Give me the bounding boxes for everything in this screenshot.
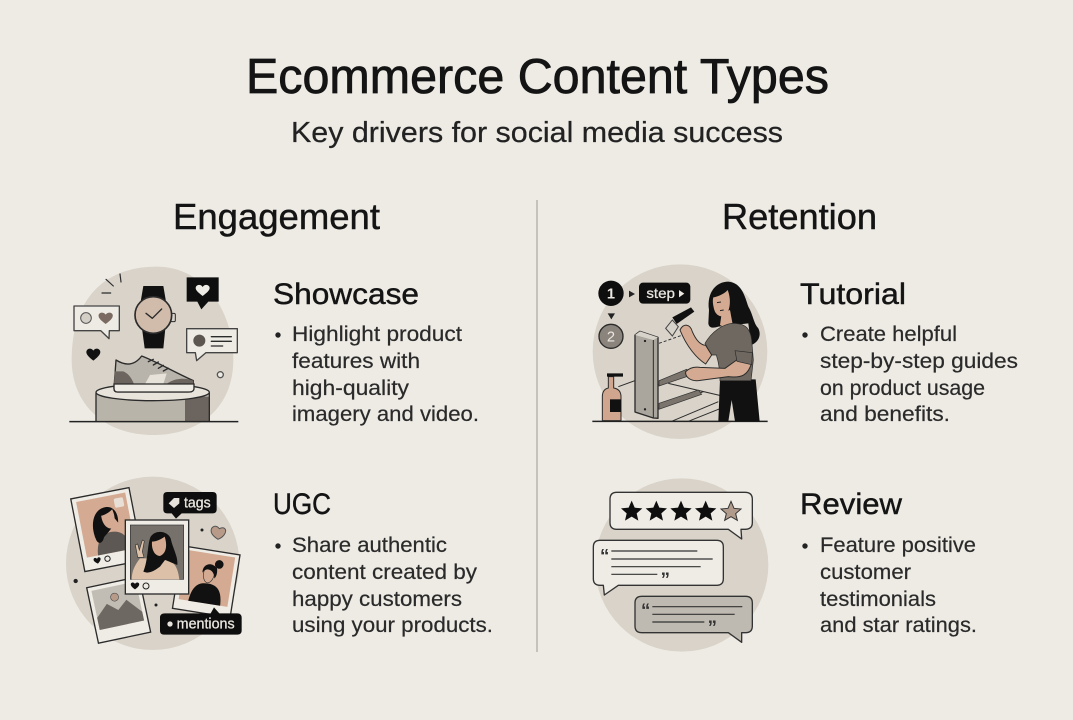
text: Tutorial bullet: step-by-step guides [820,350,1018,373]
label: opening quote: “ [600,545,609,566]
text: Tutorial bullet: Create helpful [820,323,957,346]
label: opening quote small: “ [641,600,650,621]
text: UGC bullet: Share authentic [292,534,447,557]
label: step 1: 1 [607,287,615,303]
text: UGC bullet: using your products. [292,614,493,637]
label: step: step [646,285,675,301]
panel: Showcase [69,267,479,435]
text: UGC bullet: content created by [292,561,478,584]
text: Tutorial bullet: on product usage [820,377,985,400]
text: Showcase bullet: Highlight product [292,323,462,346]
text: Tutorial bullet: and benefits. [820,403,950,426]
panel: Tutorial [592,264,1018,439]
heading: Retention: Retention [722,196,877,237]
label: tags: tags [184,495,211,511]
label: closing quote small: ” [708,616,717,637]
label: step 2: 2 [607,330,615,346]
text: Showcase bullet [275,323,479,426]
text: Review bullet [802,534,977,637]
icon: watch and sneaker on podium [69,267,238,435]
title: Ecommerce Content Types [246,50,829,104]
heading: Engagement: Engagement [173,196,380,237]
icon: user photo collage [66,477,242,650]
text: Review bullet: and star ratings. [820,614,977,637]
label: closing quote: ” [661,569,670,590]
text: Review bullet: customer [820,561,911,584]
text: Review bullet: Feature positive [820,534,976,557]
heading: Showcase: Showcase [273,278,419,311]
heading: Review: Review [800,488,902,521]
text: Tutorial bullet [802,323,1018,426]
text: UGC bullet: happy customers [292,588,462,611]
text: UGC bullet [275,534,493,637]
icon: woman demonstrating steps [592,264,768,439]
icon: star rating and testimonial bubbles [593,478,768,652]
text: Showcase bullet: features with [292,350,420,373]
text: Review bullet: testimonials [820,588,936,611]
text: Showcase bullet: imagery and video. [292,403,479,426]
heading: UGC: UGC [273,488,331,521]
text: Showcase bullet: high-quality [292,377,410,400]
label: mentions: mentions [177,617,235,633]
panel: UGC [66,477,493,650]
panel: Review [593,478,977,652]
subtitle: Key drivers for social media success [291,117,783,149]
heading: Tutorial: Tutorial [800,278,906,311]
